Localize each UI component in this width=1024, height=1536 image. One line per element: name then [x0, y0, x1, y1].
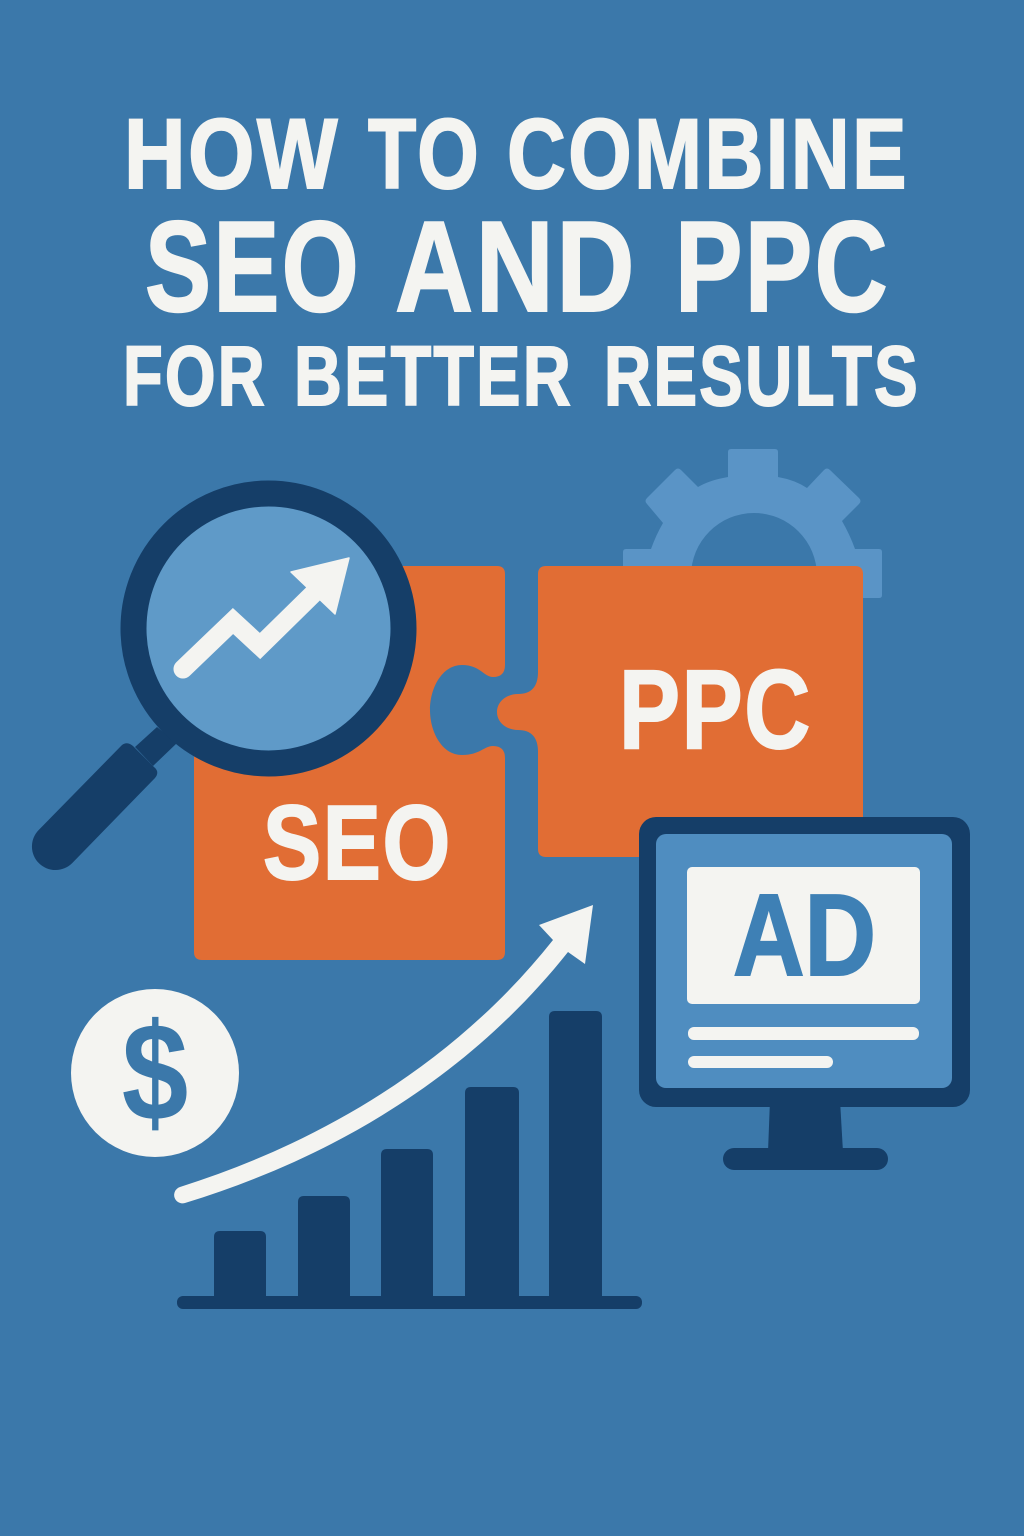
title: TO	[368, 98, 481, 209]
puzzle piece: PPC	[497, 566, 863, 857]
icon: gear	[623, 449, 882, 598]
title: SEO	[145, 195, 361, 339]
label: PPC: PPC	[619, 647, 812, 772]
icon: dollar coin	[71, 989, 239, 1157]
icon: dollar coin: $	[122, 996, 188, 1150]
arrow: growth curve	[174, 905, 593, 1203]
title: AND	[395, 195, 637, 339]
title: HOW	[124, 98, 340, 209]
title: RESULTS	[604, 329, 920, 423]
puzzle piece: SEO	[194, 566, 505, 960]
icon: monitor with ad	[639, 817, 970, 1170]
title: FOR	[123, 329, 267, 423]
title: COMBINE	[507, 98, 909, 209]
bar chart	[177, 1011, 642, 1309]
title: BETTER	[294, 329, 573, 423]
label: SEO: SEO	[263, 784, 452, 902]
title	[123, 98, 920, 423]
title: PPC	[675, 195, 890, 339]
icon: magnifying glass with trend arrow	[32, 494, 404, 870]
icon: monitor with ad: AD	[733, 870, 876, 1000]
